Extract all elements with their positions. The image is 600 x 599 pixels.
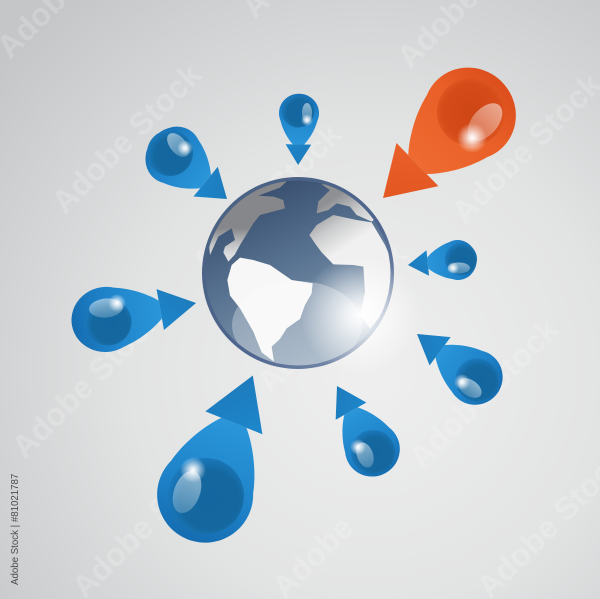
blue pin: left: [66, 271, 202, 358]
stock watermark: Adobe Stock: [184, 116, 348, 280]
stock watermark: Adobe Stock: [401, 311, 565, 475]
blue pin: bottom center: [313, 373, 410, 486]
land: south america: [227, 258, 313, 362]
land: north america: [207, 178, 290, 262]
light flare: [300, 255, 420, 375]
stock watermark: Adobe Stock: [4, 301, 168, 465]
land: africa and europe: [309, 215, 397, 328]
lens reflection: [232, 281, 362, 369]
credit text: Adobe Stock number: Adobe Stock | #81021787: [10, 474, 21, 585]
stock watermark: Adobe Stock: [44, 56, 208, 220]
land: northern europe: [317, 183, 380, 222]
stock watermark: Adobe Stock: [249, 236, 413, 400]
globe: [202, 177, 396, 369]
blue pin: right: [406, 238, 478, 285]
blue pin: lower right: [401, 312, 514, 416]
blue pin: upper left: [134, 115, 246, 222]
blue pin: large bottom left: [143, 358, 297, 557]
blue pin: top: [278, 93, 319, 165]
orange pin: [350, 49, 535, 232]
